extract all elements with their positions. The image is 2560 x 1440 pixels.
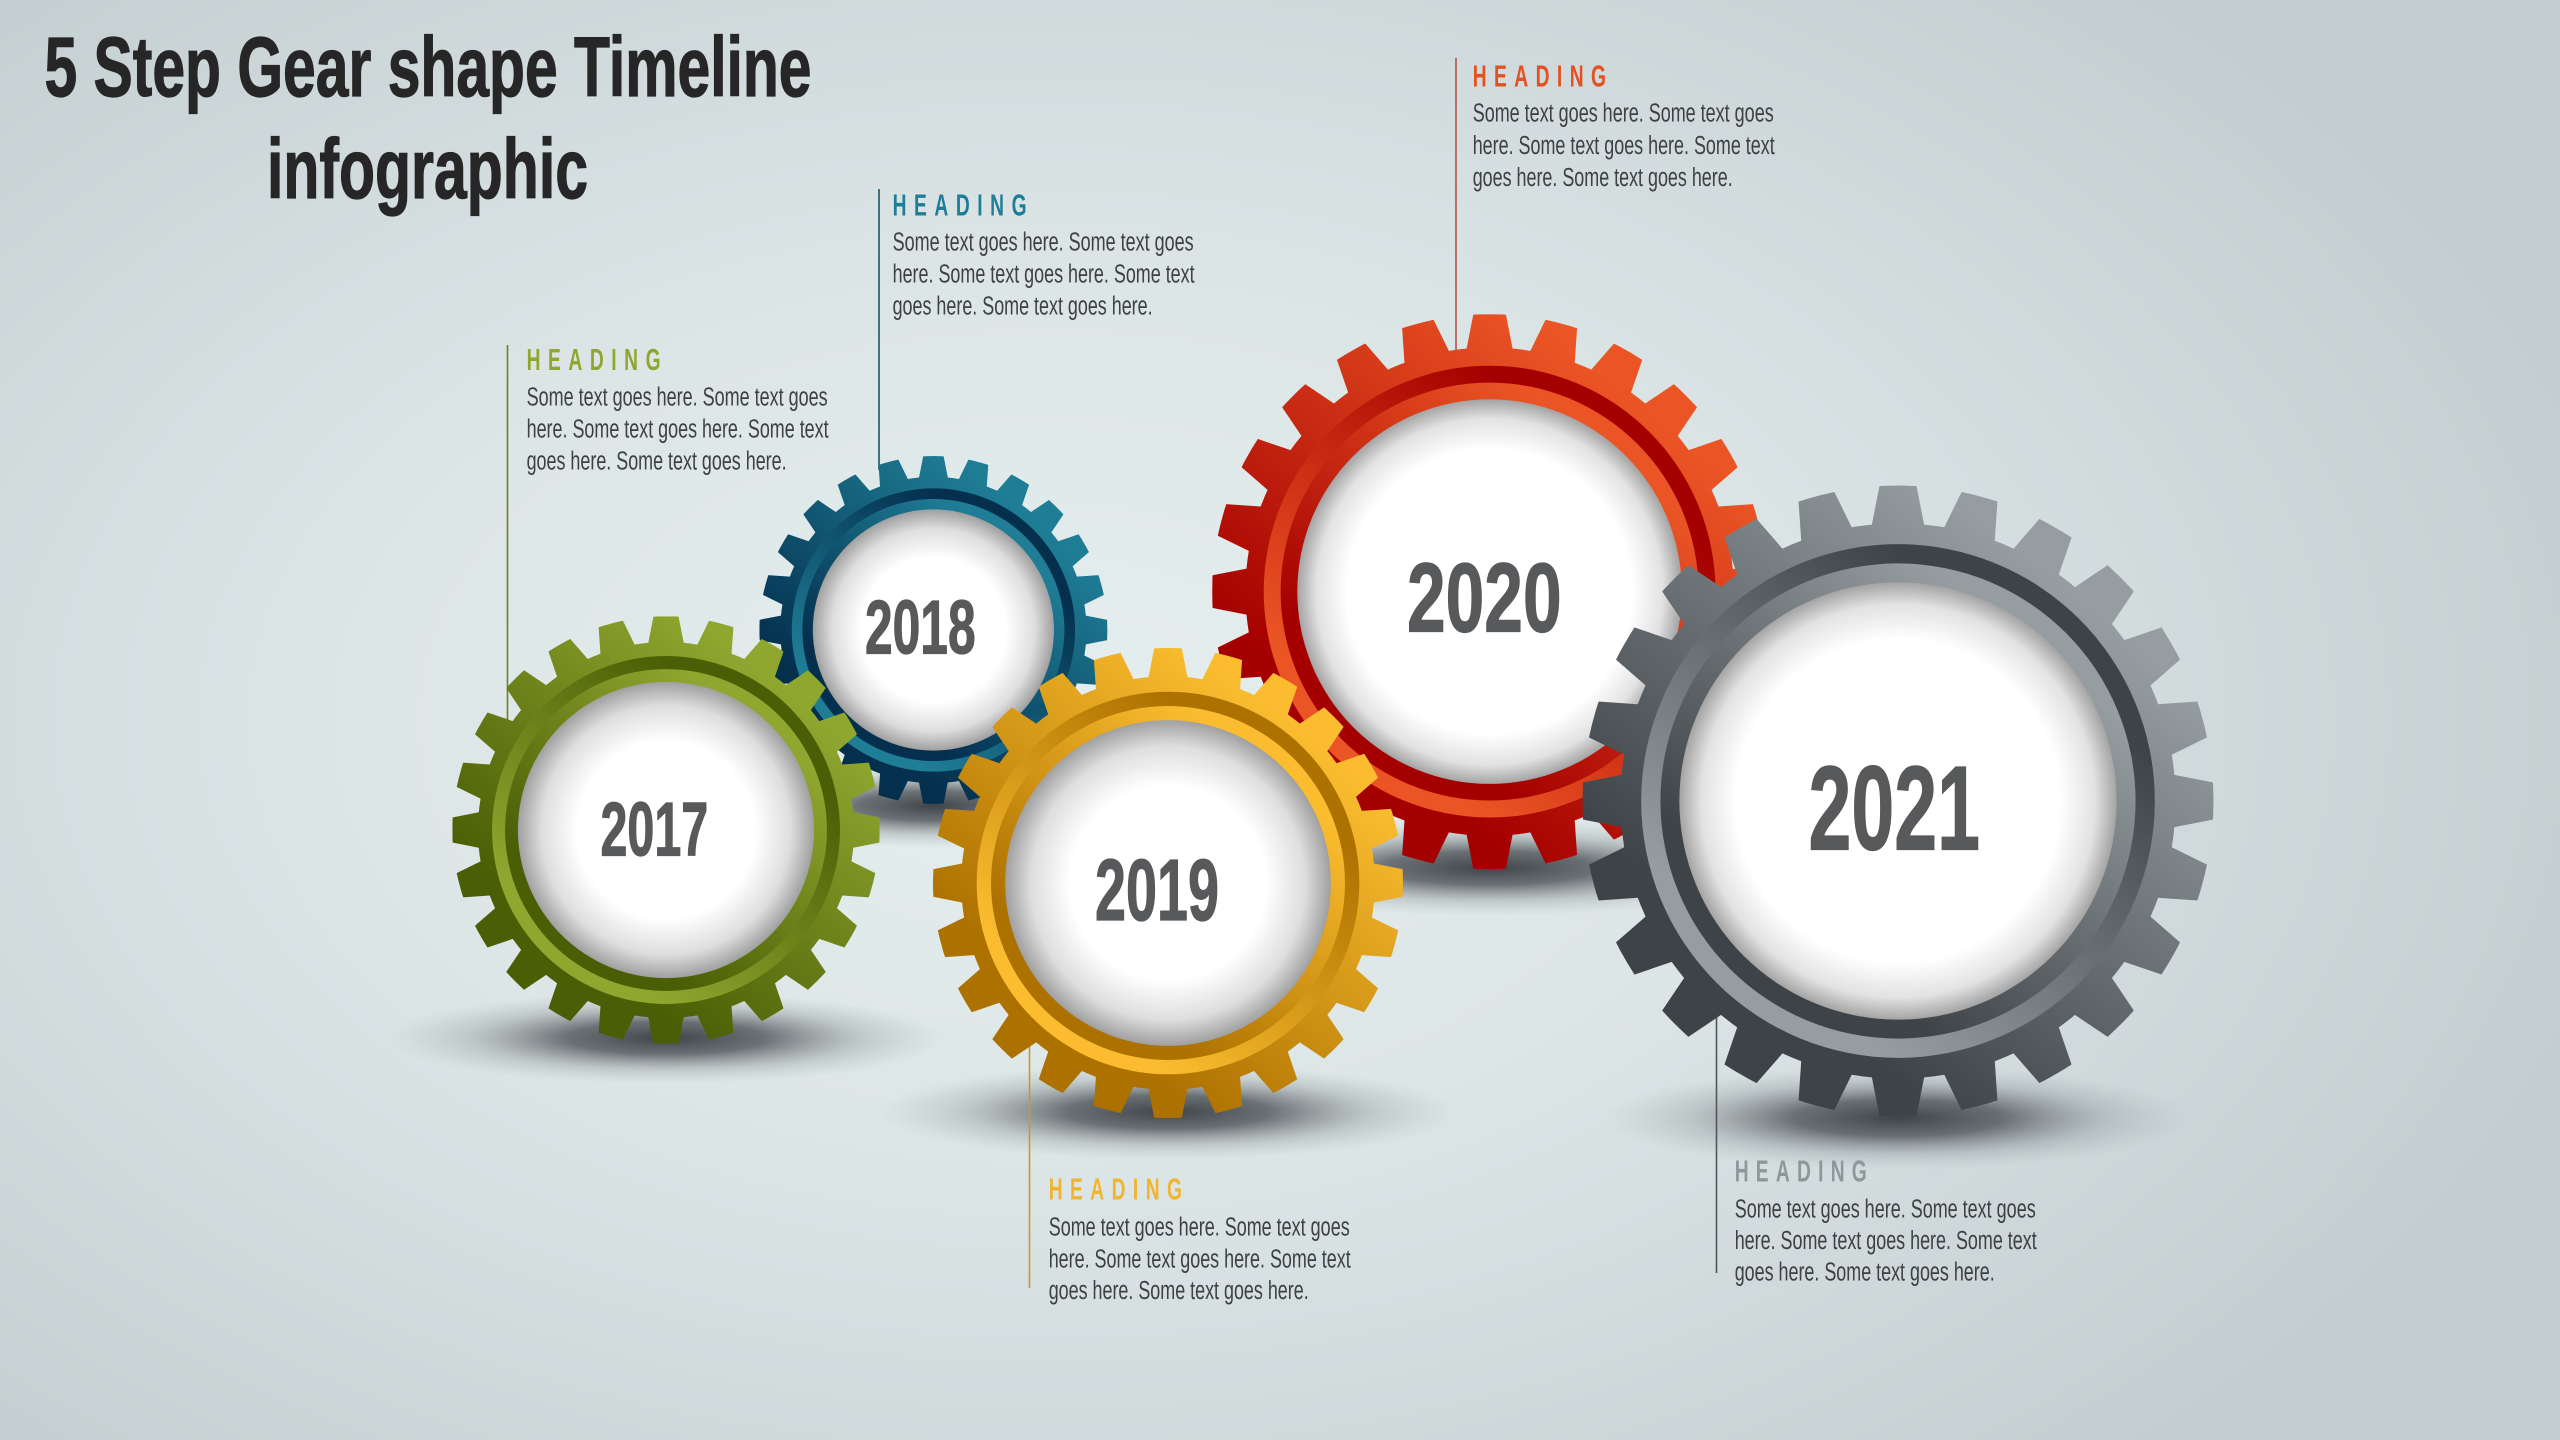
callout: 2019 text block: Some text goes here. Some text goes xyxy=(1049,1214,1350,1242)
callout: 2017 text block: here. Some text goes here. Some text xyxy=(527,415,829,443)
connector line: 2017 xyxy=(506,345,508,722)
gear: 2020 red xyxy=(1212,314,1767,869)
gear floor shadows xyxy=(386,764,2193,1170)
callout: 2020 text block: goes here. Some text goes here. xyxy=(1473,164,1733,192)
callout: 2017 text block: goes here. Some text goes here. xyxy=(527,448,787,476)
gear: 2018 teal: 2018 xyxy=(865,585,976,670)
callout: 2021 text block: here. Some text goes here. Some text xyxy=(1735,1227,2037,1255)
callout: 2021 text block: goes here. Some text goes here. xyxy=(1735,1259,1995,1287)
connector line: 2019 xyxy=(1028,1040,1030,1288)
callout: 2017 text block: Some text goes here. Some text goes xyxy=(527,384,828,412)
connector line: 2020 xyxy=(1455,58,1457,350)
callout: 2019 text block xyxy=(1049,1173,1351,1305)
callout: 2017 text block: HEADING xyxy=(527,344,661,377)
gear: 2021 grey xyxy=(1582,486,2214,1116)
callout: 2020 text block: Some text goes here. Some text goes xyxy=(1473,100,1774,128)
callout: 2019 text block: goes here. Some text goes here. xyxy=(1049,1277,1309,1305)
callout: 2018 text block xyxy=(893,189,1195,321)
callout: 2021 text block xyxy=(1735,1155,2037,1287)
connector line: 2018 xyxy=(878,189,880,470)
callout: 2019 text block: here. Some text goes here. Some text xyxy=(1049,1245,1351,1273)
callout: 2018 text block: Some text goes here. Some text goes xyxy=(893,229,1194,257)
title: 5 Step Gear shape Timeline xyxy=(44,20,812,114)
gear: 2020 red: 2020 xyxy=(1407,542,1562,652)
gear: 2017 green: 2017 xyxy=(600,788,708,873)
callout: 2017 text block xyxy=(527,344,829,476)
callout: 2019 text block: HEADING xyxy=(1049,1173,1182,1207)
connector line: 2021 xyxy=(1716,1015,1718,1273)
title xyxy=(44,20,812,216)
callout: 2020 text block: HEADING xyxy=(1473,60,1606,94)
callout: 2018 text block: goes here. Some text goes here. xyxy=(893,293,1153,321)
gear: 2018 teal xyxy=(759,456,1107,804)
callout: 2021 text block: Some text goes here. Some text goes xyxy=(1735,1195,2036,1223)
callout: 2018 text block: HEADING xyxy=(893,189,1027,223)
callout: 2018 text block: here. Some text goes here. Some text xyxy=(893,260,1195,288)
callout: 2020 text block: here. Some text goes here. Some text xyxy=(1473,132,1775,160)
callout: 2021 text block: HEADING xyxy=(1735,1155,1867,1189)
gear: 2019 yellow xyxy=(933,648,1403,1118)
gear: 2017 green xyxy=(452,616,880,1044)
gear: 2019 yellow: 2019 xyxy=(1095,842,1219,939)
gear: 2021 grey: 2021 xyxy=(1808,742,1980,876)
callout: 2020 text block xyxy=(1473,60,1775,192)
title: infographic xyxy=(267,122,588,216)
